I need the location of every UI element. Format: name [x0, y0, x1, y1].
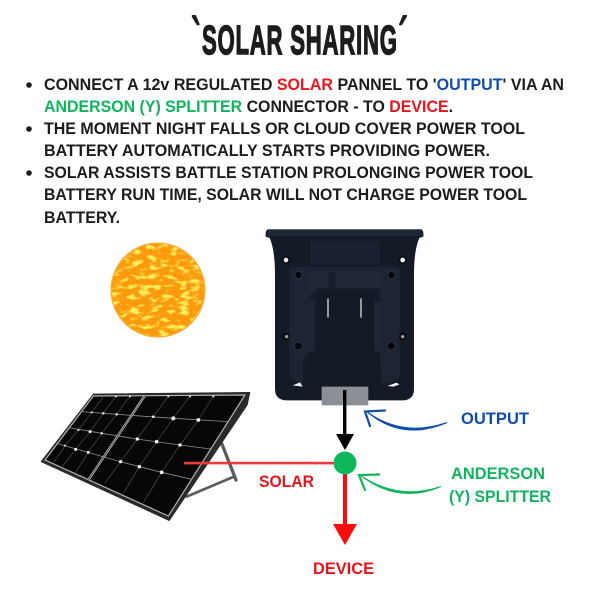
label: solar: SOLAR: [259, 473, 314, 491]
panel centre divider: [88, 395, 145, 480]
mounting plate: [289, 267, 400, 383]
device body: [266, 229, 423, 400]
panel stand: [187, 443, 236, 497]
bullet 1: [26, 75, 564, 116]
battery slot: [303, 272, 381, 383]
grey connector: [322, 387, 368, 405]
blue curved arrow: [365, 410, 447, 430]
title: ´: [398, 6, 408, 75]
title: `: [191, 6, 201, 75]
bullet 2: BATTERY AUTOMATICALLY STARTS PROVIDING POWER.: [44, 141, 490, 160]
label: output: OUTPUT: [461, 410, 529, 428]
anderson splitter node: [334, 452, 356, 474]
solar wire: [184, 462, 340, 464]
icon: sun: [110, 242, 206, 338]
bullet 2: [26, 119, 525, 160]
bullet 3: [26, 163, 533, 227]
bullet 3: SOLAR ASSISTS BATTLE STATION PROLONGING POWER TOOL: [44, 163, 533, 182]
title: SOLAR SHARING: [202, 17, 397, 63]
panel cells: [45, 395, 245, 516]
panel vertical lines: [53, 396, 213, 503]
bullet list: [26, 75, 564, 227]
bullet 3: BATTERY RUN TIME, SOLAR WILL NOT CHARGE POWER TOOL: [44, 185, 527, 204]
bullet 3: BATTERY.: [44, 208, 120, 227]
label: device: DEVICE: [313, 560, 374, 578]
white screws: [282, 256, 407, 341]
title: [191, 6, 408, 75]
bullet 1: ANDERSON (Y) SPLITTER CONNECTOR - TO DEVICE.: [44, 97, 453, 116]
bullet 1: CONNECT A 12v REGULATED SOLAR PANNEL TO 'OUTPUT' VIA AN: [44, 75, 564, 94]
red arrow: to device: [333, 470, 357, 545]
plate screws: [294, 271, 395, 350]
bullet 2: THE MOMENT NIGHT FALLS OR CLOUD COVER POWER TOOL: [44, 119, 525, 138]
solar panel: [41, 392, 250, 521]
terminals: [327, 298, 329, 318]
green curved arrow: [359, 474, 441, 494]
black arrow: output to splitter: [336, 390, 354, 450]
label: anderson (y) splitter: (Y) SPLITTER: [449, 488, 551, 506]
device: battle station: [266, 229, 423, 405]
panel junction dots: [64, 395, 214, 474]
label: anderson (y) splitter: [449, 465, 551, 506]
panel horizontal lines: [56, 412, 228, 479]
panel frame: [41, 392, 250, 521]
top recess: [311, 241, 380, 265]
side rails: [309, 301, 315, 351]
label: anderson (y) splitter: ANDERSON: [451, 465, 545, 483]
bottom slots: [293, 382, 303, 387]
top lip: [266, 229, 423, 237]
